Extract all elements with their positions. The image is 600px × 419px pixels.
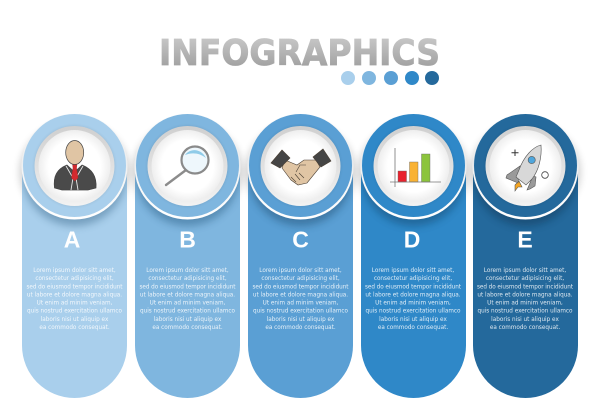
text block A: consectetur adipisicing elit, xyxy=(35,276,114,282)
text block A: Ut enim ad minim veniam, xyxy=(37,300,113,306)
text block E: ut labore et dolore magna aliqua. xyxy=(477,292,573,298)
letter B: B xyxy=(179,226,196,252)
text block B: sed do eiusmod tempor incididunt xyxy=(140,284,236,290)
text block B: laboris nisi ut aliquip ex xyxy=(154,317,222,323)
text block A: sed do eiusmod tempor incididunt xyxy=(26,284,123,290)
text block E: ea commodo consequat. xyxy=(490,325,560,331)
text block B: quis nostrud exercitation ullamco xyxy=(140,308,236,314)
panel: E xyxy=(470,114,580,398)
text block B: ut labore et dolore magna aliqua. xyxy=(140,292,235,298)
text block A: laboris nisi ut aliquip ex xyxy=(41,317,109,323)
text block A: quis nostrud exercitation ullamco xyxy=(27,308,123,314)
panel: A xyxy=(20,114,130,398)
text block C: consectetur adipisicing elit, xyxy=(261,276,340,282)
text block B: ea commodo consequat. xyxy=(152,325,223,331)
panel: C xyxy=(246,114,356,398)
text block A: ea commodo consequat. xyxy=(39,325,110,331)
text block E: laboris nisi ut aliquip ex xyxy=(491,317,559,323)
icon: businessman xyxy=(54,140,96,190)
text block C: Ut enim ad minim veniam, xyxy=(263,300,339,306)
text block E xyxy=(477,268,574,331)
icon: handshake xyxy=(271,149,331,185)
text block C: quis nostrud exercitation ullamco xyxy=(253,308,349,314)
icon: bar chart xyxy=(390,148,441,187)
letter C: C xyxy=(292,226,309,252)
text block E: Ut enim ad minim veniam, xyxy=(487,300,563,306)
text block C: laboris nisi ut aliquip ex xyxy=(267,317,335,323)
text block C xyxy=(252,268,349,331)
text block B: consectetur adipisicing elit, xyxy=(148,276,227,282)
text block B: Lorem ipsum dolor sitt amet, xyxy=(146,268,229,274)
text block E: sed do eiusmod tempor incididunt xyxy=(477,284,574,290)
panel: B xyxy=(132,114,242,398)
text block C: Lorem ipsum dolor sitt amet, xyxy=(259,268,342,274)
text block A xyxy=(26,268,123,331)
text block E: consectetur adipisicing elit, xyxy=(486,276,564,282)
title: INFOGRAPHICS xyxy=(159,33,440,74)
text block E: quis nostrud exercitation ullamco xyxy=(477,308,573,314)
letter A: A xyxy=(64,226,80,252)
icon: rocket xyxy=(506,145,548,191)
text block C: ut labore et dolore magna aliqua. xyxy=(253,292,348,298)
text block C: sed do eiusmod tempor incididunt xyxy=(252,284,349,290)
text block A: Lorem ipsum dolor sitt amet, xyxy=(33,268,116,274)
letter D: D xyxy=(404,226,420,252)
text block D: laboris nisi ut aliquip ex xyxy=(379,317,447,323)
text block D xyxy=(365,268,462,331)
text block D: quis nostrud exercitation ullamco xyxy=(365,308,461,314)
text block C: ea commodo consequat. xyxy=(265,325,336,331)
text block B: Ut enim ad minim veniam, xyxy=(150,300,226,306)
text block B xyxy=(140,268,236,331)
text block D: Lorem ipsum dolor sitt amet, xyxy=(372,268,454,274)
text block D: Ut enim ad minim veniam, xyxy=(375,300,451,306)
colour dots xyxy=(341,71,439,85)
text block A: ut labore et dolore magna aliqua. xyxy=(27,292,122,298)
panel: D xyxy=(358,114,468,398)
text block D: ut labore et dolore magna aliqua. xyxy=(365,292,461,298)
icon: magnifying glass xyxy=(166,146,208,185)
letter E: E xyxy=(517,226,533,252)
text block E: Lorem ipsum dolor sitt amet, xyxy=(484,268,566,274)
text block D: ea commodo consequat. xyxy=(378,325,448,331)
text block D: sed do eiusmod tempor incididunt xyxy=(365,284,462,290)
text block D: consectetur adipisicing elit, xyxy=(374,276,452,282)
